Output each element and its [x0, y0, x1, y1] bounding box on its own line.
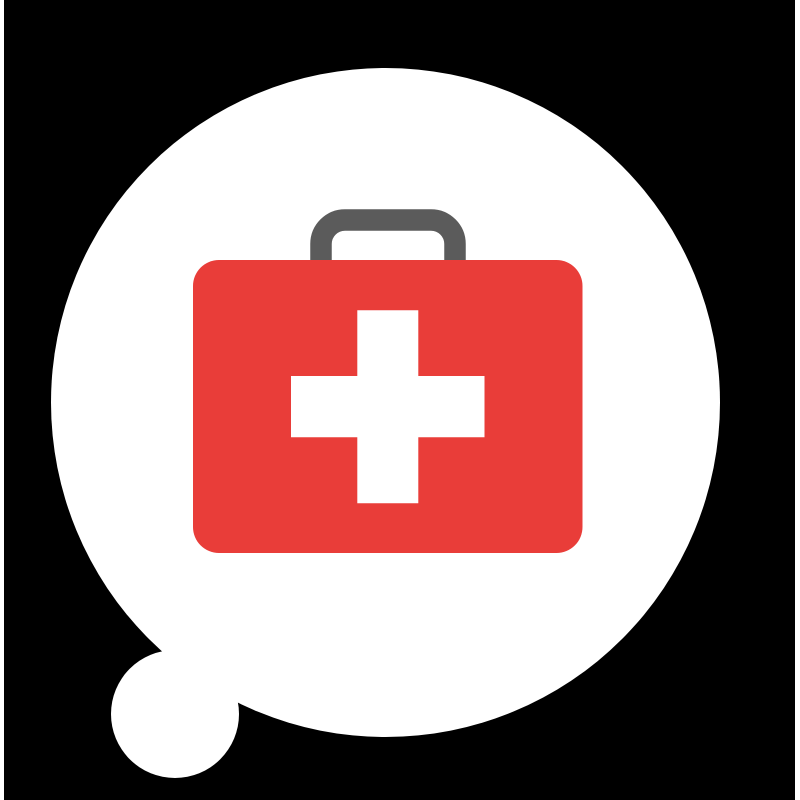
- kit case: [193, 260, 582, 553]
- bubble main circle: [51, 68, 720, 737]
- bubble tail circle: [111, 650, 239, 778]
- kit handle: [321, 220, 455, 262]
- speech bubble: [51, 68, 720, 778]
- white medical cross: [291, 310, 484, 503]
- icon: first aid kit: [193, 220, 582, 553]
